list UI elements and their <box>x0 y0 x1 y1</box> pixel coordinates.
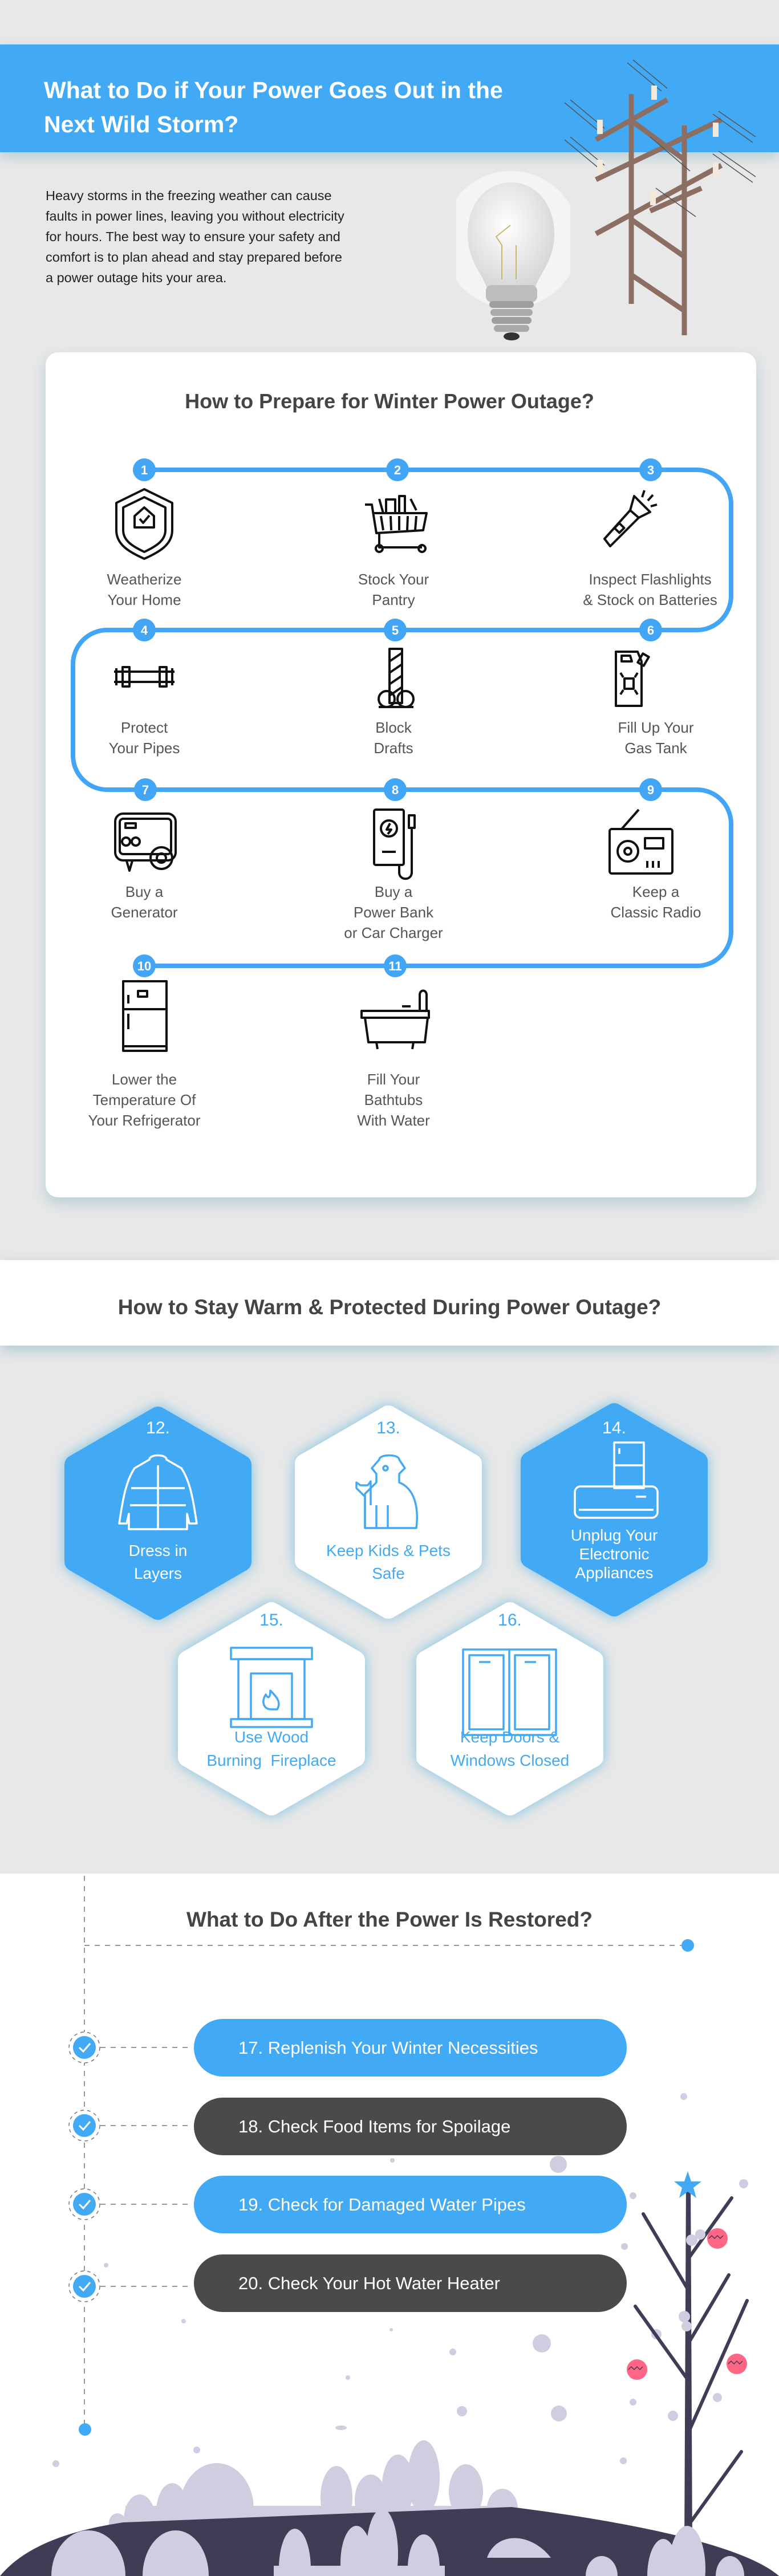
pill 18 <box>194 2098 627 2155</box>
icon: jacket <box>119 1455 197 1529</box>
icon: jerry can <box>616 652 649 706</box>
text: With Water <box>357 1112 430 1129</box>
text: Classic Radio <box>611 904 701 921</box>
text: Pantry <box>372 591 415 608</box>
heading band: stay warm <box>0 1260 779 1346</box>
text: Electronic <box>579 1545 649 1563</box>
text: 12. <box>146 1419 170 1437</box>
heading: after power restored: What to Do After the Power Is Restored? <box>186 1908 593 1931</box>
intro paragraph: comfort is to plan ahead and stay prepared before <box>46 250 342 265</box>
timeline path <box>71 458 733 977</box>
title <box>44 77 503 137</box>
timeline path: 10 <box>137 959 151 973</box>
snow dots <box>52 2093 748 2467</box>
icon: pipes <box>114 667 175 686</box>
text: Weatherize <box>107 571 182 588</box>
tree <box>627 2171 747 2549</box>
timeline path: 9 <box>647 783 654 797</box>
hex 14 <box>530 1413 698 1607</box>
text: Windows Closed <box>451 1752 569 1769</box>
text: Buy a <box>375 883 412 900</box>
intro paragraph: a power outage hits your area. <box>46 270 226 285</box>
text: Fill Up Your <box>618 719 693 736</box>
ground <box>0 2507 779 2576</box>
text: Appliances <box>575 1564 653 1582</box>
text: or Car Charger <box>344 924 443 941</box>
icon: flashlight <box>604 490 657 546</box>
pill 18: 18. Check Food Items for Spoilage <box>238 2116 510 2136</box>
text: Burning Fireplace <box>206 1752 336 1769</box>
pill 20 <box>194 2254 627 2312</box>
text: Layers <box>134 1565 182 1582</box>
icon: fridge and AC <box>575 1443 658 1518</box>
text: Temperature Of <box>93 1091 196 1108</box>
text: Bathtubs <box>364 1091 423 1108</box>
timeline path: 6 <box>647 623 654 637</box>
text: & Stock on Batteries <box>583 591 717 608</box>
title: What to Do if Your Power Goes Out in the <box>44 77 503 103</box>
text: Keep Doors & <box>460 1728 559 1746</box>
icons: prepare steps <box>114 488 673 1052</box>
timeline path: 1 <box>141 463 148 477</box>
timeline path: 11 <box>388 959 402 973</box>
icon: generator <box>115 814 176 871</box>
text: Safe <box>372 1565 405 1582</box>
text: 15. <box>259 1611 283 1630</box>
hex texts <box>129 1419 658 1769</box>
intro paragraph: for hours. The best way to ensure your safety and <box>46 229 340 244</box>
icon: fireplace <box>231 1648 312 1727</box>
text: Keep a <box>632 883 679 900</box>
text: 13. <box>376 1419 400 1437</box>
illustration: power pole <box>565 59 756 335</box>
icon: dog and cat <box>356 1455 417 1528</box>
icon: radio <box>610 810 672 873</box>
pill 19 <box>194 2176 627 2233</box>
text: 16. <box>498 1611 522 1630</box>
back clouds <box>109 2440 518 2554</box>
check icons <box>69 2032 100 2302</box>
text: 14. <box>602 1419 626 1437</box>
text: Gas Tank <box>624 740 687 757</box>
timeline path: 4 <box>141 623 148 637</box>
text: Keep Kids & Pets <box>326 1542 451 1559</box>
front clouds <box>51 2509 744 2576</box>
intro paragraph <box>46 188 344 285</box>
timeline path: 2 <box>394 463 401 477</box>
text: Protect <box>121 719 168 736</box>
intro paragraph: Heavy storms in the freezing weather can cause <box>46 188 332 203</box>
intro paragraph: faults in power lines, leaving you without electricity <box>46 209 344 224</box>
hex 12 <box>74 1416 242 1610</box>
section: after power restored <box>0 1874 779 2576</box>
labels: prepare steps <box>88 571 717 1129</box>
text: Stock Your <box>358 571 429 588</box>
decorations: timeline, snow, tree, ground <box>0 1876 779 2576</box>
text: Drafts <box>374 740 413 757</box>
title: Next Wild Storm? <box>44 111 238 137</box>
timeline path: 3 <box>647 463 654 477</box>
text: Buy a <box>125 883 163 900</box>
text: Your Refrigerator <box>88 1112 201 1129</box>
text: Your Pipes <box>109 740 180 757</box>
panel: prepare card <box>46 352 756 1197</box>
header banner <box>0 44 779 152</box>
text: Block <box>375 719 412 736</box>
timeline path: 8 <box>392 783 399 797</box>
text: Fill Your <box>367 1071 420 1088</box>
icon: doors <box>463 1649 556 1735</box>
pill 20: 20. Check Your Hot Water Heater <box>238 2273 500 2293</box>
timeline path: 7 <box>142 783 149 797</box>
text: Your Home <box>107 591 181 608</box>
hex 15 <box>188 1612 355 1806</box>
hexagons <box>55 1396 717 1823</box>
illustration: light bulb <box>456 171 570 340</box>
text: Dress in <box>129 1542 187 1559</box>
timeline path: 5 <box>392 623 399 637</box>
icon: bathtub <box>362 991 429 1049</box>
icon: refrigerator <box>123 981 167 1051</box>
icon: shield home <box>116 489 172 559</box>
icon: power bank <box>374 810 415 879</box>
text: Generator <box>111 904 178 921</box>
text: Lower the <box>112 1071 177 1088</box>
pill 19: 19. Check for Damaged Water Pipes <box>238 2195 526 2215</box>
heading: prepare: How to Prepare for Winter Power Outage? <box>185 389 594 413</box>
pill 17 <box>194 2019 627 2077</box>
pill 17: 17. Replenish Your Winter Necessities <box>238 2038 538 2058</box>
text: Power Bank <box>354 904 433 921</box>
icon: shopping cart <box>365 496 427 552</box>
heading: stay warm: How to Stay Warm & Protected During Power Outage? <box>118 1295 661 1319</box>
icon: draft stopper <box>379 649 413 707</box>
text: Use Wood <box>234 1728 309 1746</box>
text: Unplug Your <box>571 1526 658 1544</box>
text: Inspect Flashlights <box>589 571 712 588</box>
hex 16 <box>426 1612 594 1806</box>
hex 13 <box>305 1415 472 1609</box>
